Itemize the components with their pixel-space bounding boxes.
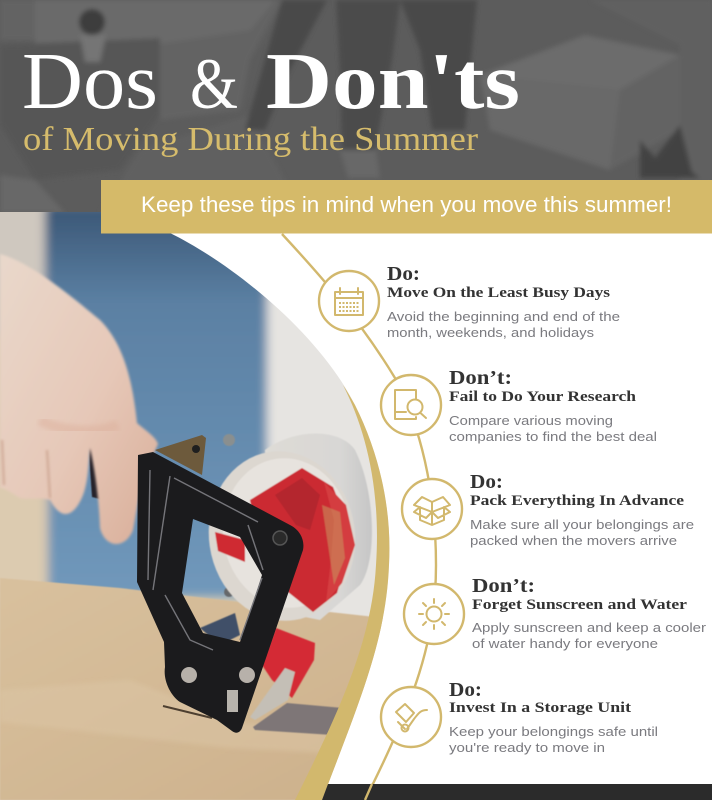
tip 2 text: companies to find the best deal	[449, 429, 657, 444]
gold crescent curve	[295, 385, 389, 800]
tip 2 text: Compare various moving	[449, 413, 613, 428]
tip 5	[381, 679, 658, 755]
red cutter guard and blade	[200, 613, 343, 735]
tape roll	[198, 434, 372, 630]
cardboard box	[0, 578, 420, 800]
icon: hand truck with box	[381, 687, 441, 747]
tip 4 text: Forget Sunscreen and Water	[472, 597, 687, 613]
tip 4	[404, 575, 707, 651]
icon: phone with magnifier	[381, 375, 441, 435]
tip 1	[319, 263, 620, 340]
tip 3 text: Pack Everything In Advance	[470, 493, 684, 509]
tip 5 text: Invest In a Storage Unit	[449, 700, 631, 716]
tip 5 text: you're ready to move in	[449, 740, 605, 755]
tip 3 text: packed when the movers arrive	[470, 533, 677, 548]
tip 3 text: Do:	[470, 471, 503, 493]
banner: Keep these tips in mind when you move this summer!	[141, 192, 672, 217]
tip 5 text	[449, 679, 658, 755]
tip 2 text	[449, 367, 657, 444]
footer bar	[322, 784, 712, 800]
title: Dos	[22, 38, 158, 126]
tip 3 text: Make sure all your belongings are	[470, 517, 694, 532]
tip 3 text	[470, 471, 694, 548]
banner	[101, 180, 712, 234]
header photo background	[0, 0, 712, 213]
tip 2 text: Don’t:	[449, 367, 512, 389]
tip 1 text: Move On the Least Busy Days	[387, 285, 610, 301]
tip 1 text: month, weekends, and holidays	[387, 325, 595, 340]
photo: tape dispenser on cardboard box	[0, 212, 383, 800]
tip 4 text	[472, 575, 707, 651]
hand	[0, 254, 158, 544]
title: Don'ts	[266, 38, 520, 126]
tip 1 text: Do:	[387, 263, 420, 285]
black dispenser body	[137, 435, 303, 733]
title: &	[190, 44, 238, 124]
subtitle: of Moving During the Summer	[23, 121, 479, 158]
tip 5 text: Do:	[449, 679, 482, 701]
gold connector line	[282, 234, 436, 800]
title	[22, 38, 520, 126]
tip 3	[402, 471, 694, 548]
shirt background	[0, 212, 390, 617]
tip 5 text: Keep your belongings safe until	[449, 724, 658, 739]
tip 1 text: Avoid the beginning and end of the	[387, 309, 620, 324]
tip 4 text: Don’t:	[472, 575, 535, 597]
dispenser grip under the fingers	[88, 448, 100, 500]
white content panel	[170, 233, 712, 800]
icon: sun	[404, 584, 464, 644]
icon: open box	[402, 479, 462, 539]
tip 2 text: Fail to Do Your Research	[449, 389, 637, 405]
tip 4 text: Apply sunscreen and keep a cooler	[472, 620, 707, 635]
tip 4 text: of water handy for everyone	[472, 636, 658, 651]
tip 2	[381, 367, 657, 444]
tip 1 text	[387, 263, 620, 340]
icon: calendar	[319, 271, 379, 331]
